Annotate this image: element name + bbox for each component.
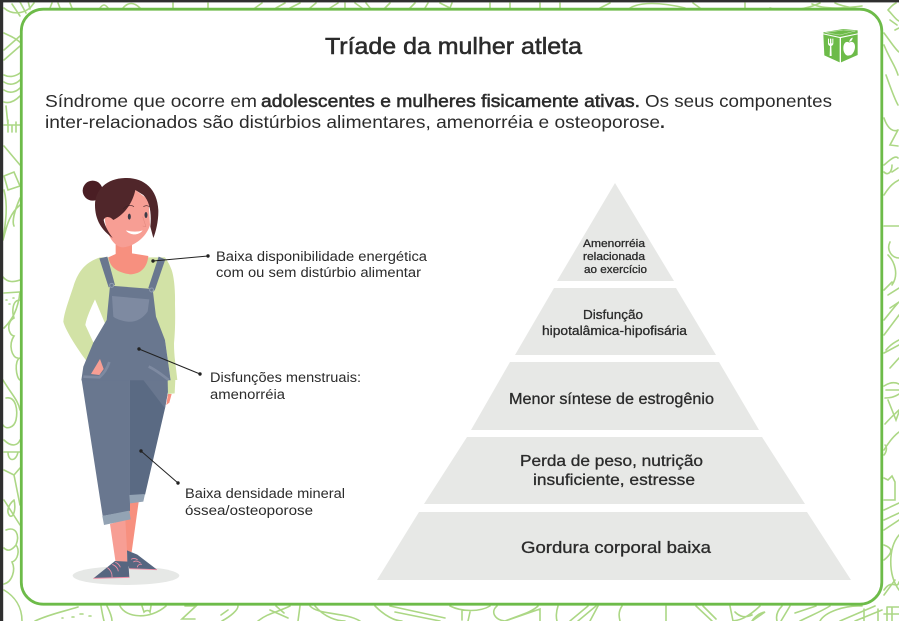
overalls bib [81,286,171,380]
shoes [93,550,157,578]
tier 3 [471,362,759,430]
intro paragraph: Os seus componentes [645,91,832,111]
callout: bone: Baixa densidade mineral [185,486,345,501]
torso and sleeves [63,257,177,380]
intro paragraph: inter-relacionados são distúrbios alimentares, amenorréia e osteoporose [45,112,660,132]
neck and chest [108,233,148,274]
tier 3: Menor síntese de estrogênio [509,391,714,408]
overall legs [82,380,170,525]
tier 1: relacionada [583,251,646,263]
callout: bone: óssea/osteoporose [185,503,313,518]
hip pockets and hand [83,359,169,380]
intro paragraph [45,91,832,132]
tier 1: ao exercício [584,264,647,276]
legs [110,502,139,563]
callout: energia: Baixa disponibilidade energética [216,249,428,264]
intro paragraph: adolescentes e mulheres fisicamente ativas. [261,91,640,111]
tier 5: Gordura corporal baixa [521,539,712,557]
hair [95,178,158,238]
tier 2 [515,288,716,355]
bun [83,181,103,201]
shadow [73,566,179,585]
tier 1: Amenorréia [583,238,646,250]
intro paragraph: . [660,112,665,132]
callout: menstrual: amenorréia [210,387,286,402]
intro paragraph: Síndrome que ocorre em [45,91,257,111]
smile [126,230,143,234]
callout: bone [139,449,345,518]
title: Tríade da mulher atleta [325,33,582,59]
tier 4 [424,437,805,504]
icon: green food box logo [823,29,858,62]
bib pocket [112,296,149,322]
callout: energia [151,249,428,280]
callout: energia: com ou sem distúrbio alimentar [216,265,422,280]
callout: menstrual [137,347,361,402]
tier 2: Disfunção [583,308,643,322]
tier 1 [557,183,674,281]
tier 4: Perda de peso, nutrição [520,453,703,470]
buckles [110,283,154,292]
face [104,188,150,247]
eyes and brows [123,206,151,227]
hand and sleeve [168,380,175,394]
pyramid [377,183,851,580]
tier 4: insuficiente, estresse [533,472,695,489]
tier 5 [377,512,851,580]
tier 2: hipotalâmica-hipofisária [542,324,687,338]
illustration: woman athlete in overalls [63,178,179,585]
straps [99,257,165,291]
callout: menstrual: Disfunções menstruais: [210,370,361,385]
